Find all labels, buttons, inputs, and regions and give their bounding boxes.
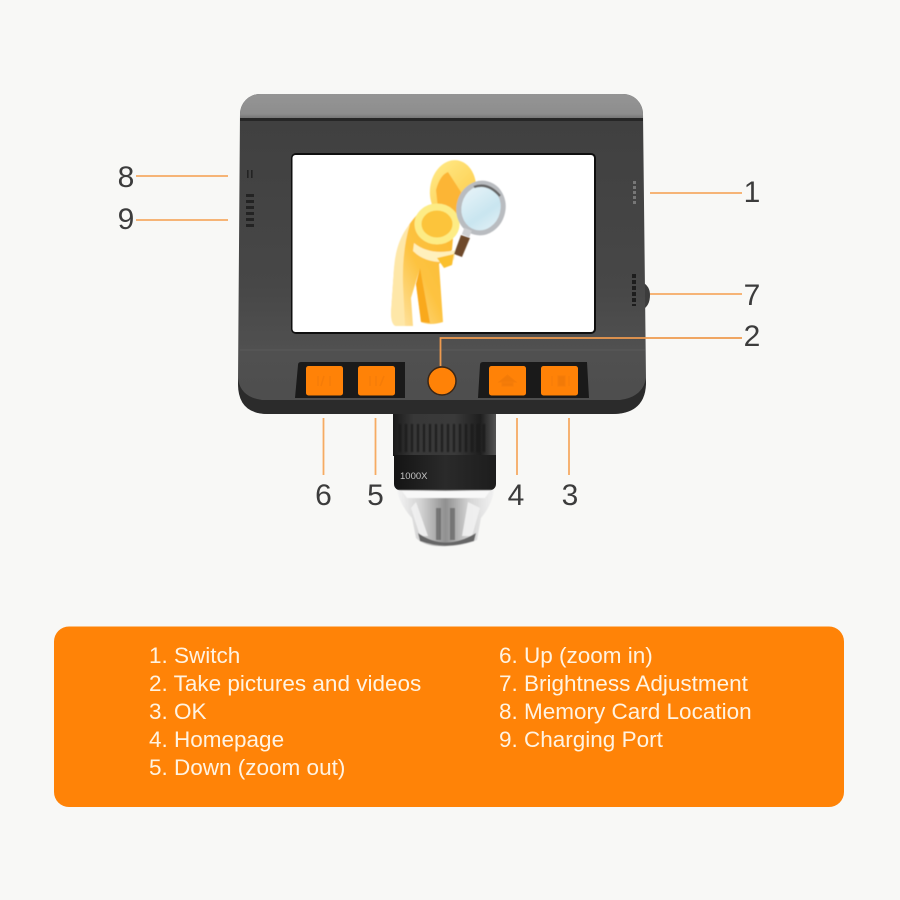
body and legs — [391, 204, 455, 326]
legend right column: 8. Memory Card Location — [499, 699, 752, 724]
handle — [454, 235, 470, 257]
button glyphs — [499, 375, 569, 386]
legend left column: 4. Homepage — [149, 727, 284, 752]
legend right column: 6. Up (zoom in) — [499, 643, 653, 668]
legend left column: 3. OK — [149, 699, 207, 724]
button 4 — [489, 366, 526, 396]
legend right column: 9. Charging Port — [499, 727, 664, 752]
brightness wheel — [642, 282, 650, 310]
microscope LED cap — [397, 490, 494, 546]
button 3 — [541, 366, 578, 396]
legend panel — [54, 626, 844, 807]
hand — [437, 254, 454, 268]
legend left column — [149, 643, 421, 780]
screen — [291, 153, 596, 334]
button 6 — [306, 366, 343, 396]
device body — [238, 94, 646, 414]
callout numbers: 6 — [315, 479, 332, 512]
callout numbers: 7 — [744, 279, 760, 312]
legend left column: 2. Take pictures and videos — [149, 671, 421, 696]
callout lines — [136, 176, 742, 475]
button panel left — [295, 362, 405, 398]
legend left column: 5. Down (zoom out) — [149, 755, 345, 780]
callout numbers: 5 — [367, 479, 384, 512]
button 2: shutter — [428, 367, 456, 395]
button glyphs — [318, 376, 384, 386]
screen figure with magnifying glass — [391, 157, 508, 326]
button panel right — [478, 362, 589, 398]
callout numbers: 2 — [744, 320, 760, 353]
right switch markings — [633, 181, 636, 205]
lens — [454, 178, 508, 238]
callout numbers: 8 — [118, 161, 134, 194]
lower face highlight — [240, 349, 645, 351]
microscope objective barrel — [393, 398, 496, 492]
callout numbers: 9 — [118, 203, 134, 236]
left port markings — [246, 170, 254, 227]
callout numbers — [118, 161, 760, 512]
callout numbers: 1 — [744, 176, 760, 209]
head — [426, 157, 480, 223]
legend left column: 1. Switch — [149, 643, 240, 668]
button 5 — [358, 366, 395, 396]
sleeve — [413, 243, 456, 262]
top band — [240, 94, 643, 119]
right brightness markings — [632, 274, 636, 306]
bottom edge — [238, 378, 646, 414]
magnification label: 1000X — [400, 471, 428, 482]
callout numbers: 3 — [562, 479, 578, 512]
callout numbers: 4 — [508, 479, 524, 512]
legend right column — [499, 643, 752, 752]
arm loop — [418, 207, 456, 241]
legend right column: 7. Brightness Adjustment — [499, 671, 749, 696]
